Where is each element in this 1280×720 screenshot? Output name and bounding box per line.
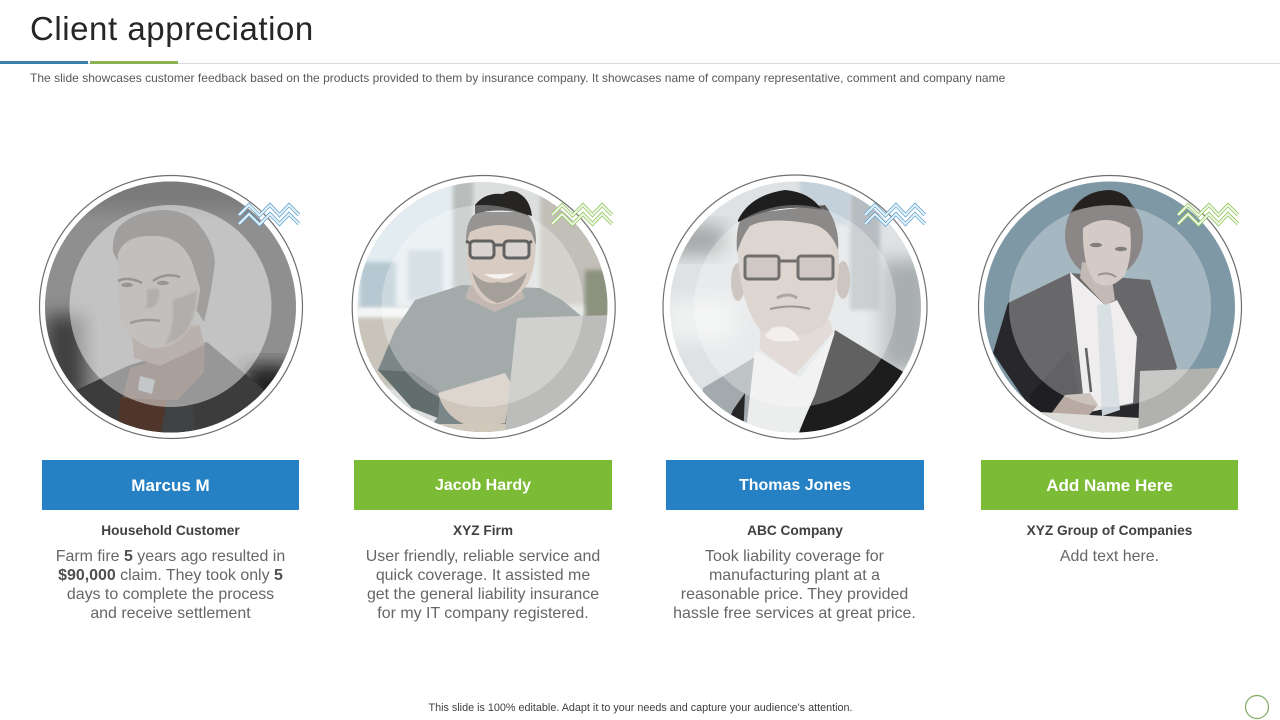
icon: green zigzag	[1178, 205, 1238, 224]
outer ring	[352, 176, 615, 438]
tie	[118, 398, 167, 432]
outer ring	[978, 176, 1242, 438]
hair	[1065, 191, 1143, 279]
nose and mouth	[777, 295, 797, 298]
translucent overlay disc	[70, 205, 272, 407]
glasses	[745, 256, 833, 279]
subtitle: The slide showcases customer feedback based on the products provided to them by insurance company. It showcases name of company representative, comment and company name	[30, 71, 1005, 85]
shirt	[122, 344, 205, 400]
jacket	[993, 273, 1177, 420]
footer note: This slide is 100% editable. Adapt it to your needs and capture your audience's attention.	[428, 702, 852, 714]
eyes and mouth	[1090, 243, 1102, 247]
photo	[670, 182, 921, 432]
comment: Jacob Hardy: get the general liability insurance	[367, 586, 599, 603]
jacket	[76, 342, 264, 432]
name bar: Jacob Hardy	[354, 460, 612, 510]
icon: blue zigzag	[239, 205, 299, 224]
face	[117, 236, 200, 348]
comment: Thomas Jones	[673, 548, 916, 622]
short side hair	[466, 212, 536, 245]
face	[467, 221, 536, 304]
face shadow	[143, 288, 197, 344]
hair sides	[737, 205, 838, 253]
portrait: Add Name Here	[978, 175, 1242, 440]
hair top	[1072, 190, 1132, 211]
comment: Marcus M: days to complete the process	[67, 586, 274, 603]
glasses	[466, 241, 532, 258]
strap	[731, 393, 745, 422]
comment: Thomas Jones: Took liability coverage for	[705, 548, 884, 565]
outer ring	[663, 175, 927, 439]
icon: green zigzag	[552, 205, 612, 224]
neck	[465, 285, 525, 312]
neck	[1080, 262, 1115, 305]
company: ABC Company: ABC Company	[747, 523, 843, 538]
header rule	[0, 61, 1280, 64]
comment: Marcus M: Farm fire 5 years ago resulted in	[56, 548, 285, 565]
collar	[138, 376, 155, 394]
name bar: Add Name Here: Add Name Here	[1046, 476, 1173, 495]
comment: Jacob Hardy	[366, 548, 600, 622]
eyes and mouth	[118, 275, 180, 283]
comment: Jacob Hardy: for my IT company registered.	[377, 605, 589, 622]
name bar: Marcus M: Marcus M	[131, 476, 210, 495]
portrait: Jacob Hardy	[350, 175, 616, 440]
tie	[1097, 303, 1120, 416]
laptop	[1138, 368, 1218, 440]
title: Client appreciation	[30, 10, 314, 47]
ears	[731, 263, 744, 301]
lower jacket	[1030, 350, 1085, 420]
portrait: Marcus M	[40, 170, 302, 440]
portrait: Thomas Jones	[663, 175, 930, 440]
comment: Thomas Jones: reasonable price. They provided	[681, 586, 908, 603]
comment: Thomas Jones: manufacturing plant at a	[709, 567, 880, 584]
neck	[132, 325, 204, 366]
comment: Marcus M	[56, 548, 285, 622]
chin highlight	[765, 326, 800, 342]
face	[1083, 220, 1131, 286]
icon: blue zigzag	[865, 205, 925, 224]
photo	[978, 175, 1242, 440]
company: Household Customer: Household Customer	[101, 523, 240, 538]
name bar: Add Name Here	[981, 460, 1238, 510]
icon: corner circle	[1246, 696, 1268, 718]
neck	[760, 320, 833, 375]
comment: Thomas Jones: hassle free services at great price.	[673, 605, 916, 622]
name bar: Thomas Jones	[666, 460, 924, 510]
lapel	[160, 430, 196, 432]
lower arm	[378, 370, 440, 418]
desk	[1040, 412, 1140, 440]
table	[439, 424, 508, 432]
translucent overlay disc	[1009, 205, 1211, 407]
face	[738, 220, 839, 330]
company: XYZ Firm: XYZ Firm	[453, 523, 513, 538]
jacket left	[702, 358, 787, 432]
jacket right	[799, 330, 903, 432]
pen	[1086, 348, 1091, 392]
hair	[475, 191, 532, 216]
hand	[438, 373, 512, 428]
comment: Jacob Hardy: User friendly, reliable service and	[366, 548, 600, 565]
comment: Jacob Hardy: quick coverage. It assisted me	[376, 567, 590, 584]
sweater	[378, 285, 590, 440]
beard	[472, 272, 527, 303]
photo	[358, 182, 608, 432]
name bar: Jacob Hardy: Jacob Hardy	[435, 477, 531, 494]
hand	[1048, 393, 1098, 422]
comment: Marcus M: and receive settlement	[90, 605, 251, 622]
hair top	[738, 190, 822, 222]
comment: Add Name Here: Add text here.	[1060, 548, 1159, 565]
translucent overlay disc	[694, 205, 896, 407]
laptop	[505, 315, 608, 430]
hair	[113, 210, 215, 322]
comment: Marcus M: $90,000 claim. They took only 5	[58, 567, 283, 584]
translucent overlay disc	[382, 205, 584, 407]
company: XYZ Group of Companies: XYZ Group of Companies	[1027, 523, 1192, 538]
outer ring	[40, 176, 302, 438]
photo	[45, 182, 296, 432]
name bar: Thomas Jones: Thomas Jones	[739, 477, 851, 494]
smile	[484, 273, 515, 279]
shirt	[1070, 272, 1137, 413]
name bar: Marcus M	[42, 460, 299, 510]
shirt	[745, 332, 835, 440]
